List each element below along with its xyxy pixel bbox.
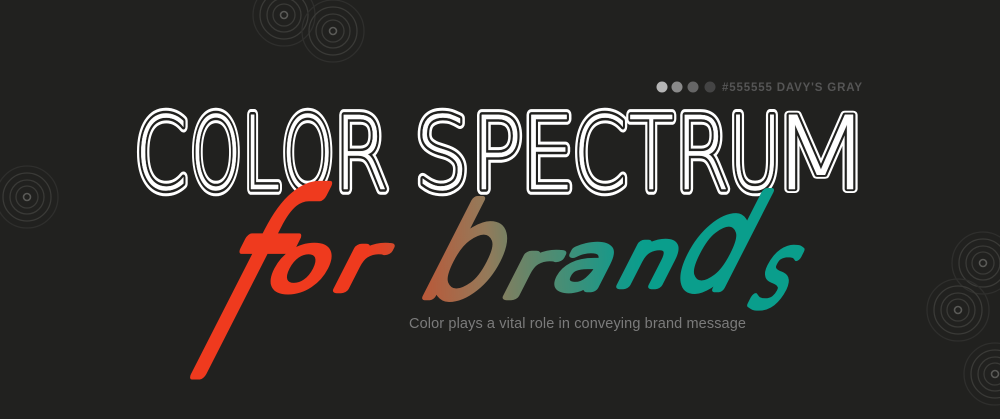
icon: concentric rings right 3 [964,343,1000,405]
title: COLOR SPECTRUM: R [675,95,730,214]
title: COLOR SPECTRUM: U [728,95,782,214]
title: COLOR SPECTRUM: O [282,95,334,214]
title: COLOR SPECTRUM: C [573,95,627,214]
title: COLOR SPECTRUM: O [282,95,334,214]
script heading: for brands: o [253,219,355,307]
icon: concentric rings right 1 [952,232,1000,294]
title: COLOR SPECTRUM: U [728,95,782,214]
script heading: for brands: a [539,218,639,306]
color swatch dots [656,82,716,92]
title: COLOR SPECTRUM: L [243,95,280,214]
title: COLOR SPECTRUM: T [629,95,674,214]
title: COLOR SPECTRUM: O [190,95,241,214]
title: COLOR SPECTRUM: P [472,95,522,214]
title: COLOR SPECTRUM: E [521,95,575,214]
title: COLOR SPECTRUM: T [629,95,674,214]
title: COLOR SPECTRUM: R [334,95,389,214]
title: COLOR SPECTRUM: O [190,95,241,214]
title: COLOR SPECTRUM: O [282,95,334,214]
script heading: for brands: b [398,179,548,326]
title: COLOR SPECTRUM: M [770,95,872,214]
title: COLOR SPECTRUM: O [190,95,241,214]
title: COLOR SPECTRUM: P [472,95,522,214]
title: COLOR SPECTRUM: C [135,95,188,214]
title: COLOR SPECTRUM: L [243,95,280,214]
title: COLOR SPECTRUM: R [675,95,730,214]
title: COLOR SPECTRUM: S [415,95,469,214]
title: COLOR SPECTRUM: R [334,95,389,214]
title: COLOR SPECTRUM: E [521,95,575,214]
title: COLOR SPECTRUM: T [629,95,674,214]
title: COLOR SPECTRUM: C [573,95,627,214]
title: COLOR SPECTRUM: C [135,95,188,214]
script heading: for brands: n [603,215,702,303]
title: COLOR SPECTRUM: C [573,95,627,214]
title: COLOR SPECTRUM: R [334,95,389,214]
script heading: for brands: d [650,171,793,318]
title: COLOR SPECTRUM: E [521,95,575,214]
title: COLOR SPECTRUM: M [770,95,872,214]
title: COLOR SPECTRUM: S [415,95,469,214]
icon: concentric rings top 1 [253,0,315,46]
title: COLOR SPECTRUM: U [728,95,782,214]
title: COLOR SPECTRUM: C [135,95,188,214]
icon: concentric rings top 2 [302,0,364,62]
title: COLOR SPECTRUM: S [415,95,469,214]
script heading: for brands: s [732,213,828,329]
title: COLOR SPECTRUM: P [472,95,522,214]
color label: #555555 DAVY'S GRAY [722,82,862,94]
icon: concentric rings left [0,166,58,228]
title: COLOR SPECTRUM: L [243,95,280,214]
title: COLOR SPECTRUM: M [770,95,872,214]
script heading: for brands: r [488,226,575,314]
subtitle: Color plays a vital role in conveying brand message [409,316,746,332]
title: COLOR SPECTRUM: R [675,95,730,214]
script heading: for brands: r [319,219,403,307]
title: COLOR SPECTRUM [135,95,872,214]
icon: concentric rings right 2 [927,279,989,341]
